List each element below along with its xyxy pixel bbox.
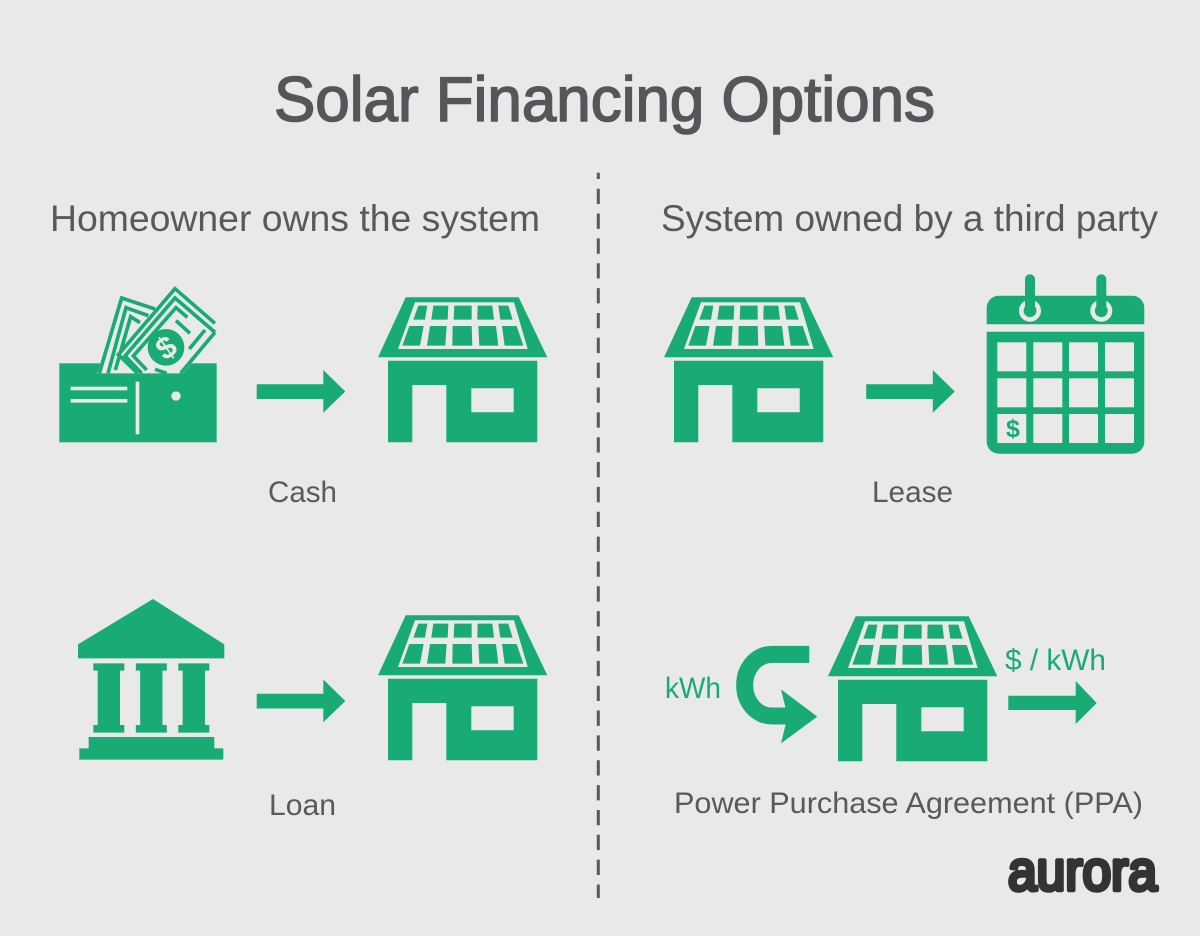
icon: solar house (lease) bbox=[664, 297, 833, 442]
arrow: PPA output bbox=[1008, 681, 1097, 724]
icon: solar house (cash) bbox=[378, 297, 547, 442]
front banknote bbox=[116, 286, 217, 373]
label: kWh: kWh bbox=[665, 672, 721, 705]
icon: solar house (loan) bbox=[378, 615, 547, 760]
dollar coin bbox=[148, 329, 184, 366]
calendar dollar sign: $ bbox=[1006, 415, 1020, 443]
logo: aurora: aurora bbox=[1008, 839, 1158, 902]
wallet body bbox=[59, 363, 217, 442]
heading: homeowner owns the system: Homeowner owns the system bbox=[50, 198, 540, 239]
label: cash: Cash bbox=[268, 476, 337, 509]
arrow: lease bbox=[866, 370, 955, 413]
label: lease: Lease bbox=[872, 476, 953, 509]
icon: calendar bbox=[987, 274, 1144, 454]
label: power purchase agreement: Power Purchase Agreement (PPA) bbox=[674, 787, 1143, 820]
arrow: curved kWh bbox=[745, 654, 817, 743]
arrow: loan bbox=[257, 680, 345, 722]
icon: bank bbox=[78, 599, 224, 760]
heading: system owned by a third party: System owned by a third party bbox=[661, 198, 1158, 239]
label: loan: Loan bbox=[269, 789, 336, 822]
label: dollars per kWh: $ / kWh bbox=[1005, 644, 1106, 677]
title: Solar Financing Options bbox=[274, 65, 935, 135]
icon: solar house (PPA) bbox=[828, 616, 997, 761]
back banknote bbox=[97, 295, 157, 373]
arrow: cash bbox=[257, 370, 345, 413]
front banknote: $ bbox=[149, 328, 183, 367]
wallet details bbox=[71, 382, 181, 434]
dashed divider bbox=[597, 173, 600, 898]
icon: wallet with cash bbox=[59, 286, 217, 442]
